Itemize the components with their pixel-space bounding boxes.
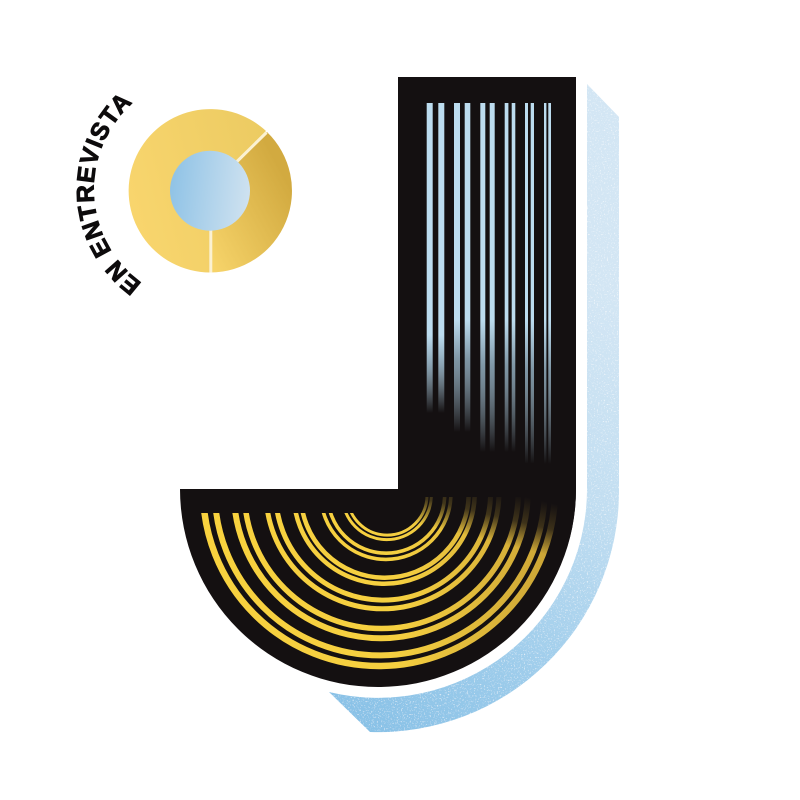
donut icon (129, 109, 292, 273)
donut: large gold segment (129, 109, 266, 273)
gold concentric arcs in the hook (201, 497, 557, 670)
donut: right gold segment (210, 132, 292, 273)
letter J: light blue extruded side (329, 84, 619, 732)
donut: divider lines (211, 132, 266, 272)
curved label: EN ENTREVISTA: EN ENTREVISTA (76, 95, 142, 296)
blue vertical bars fading down the stem (427, 103, 551, 464)
fade over right ends of gold arcs (415, 490, 576, 554)
donut: blue centre (170, 151, 250, 231)
letter J: black body (180, 77, 576, 687)
